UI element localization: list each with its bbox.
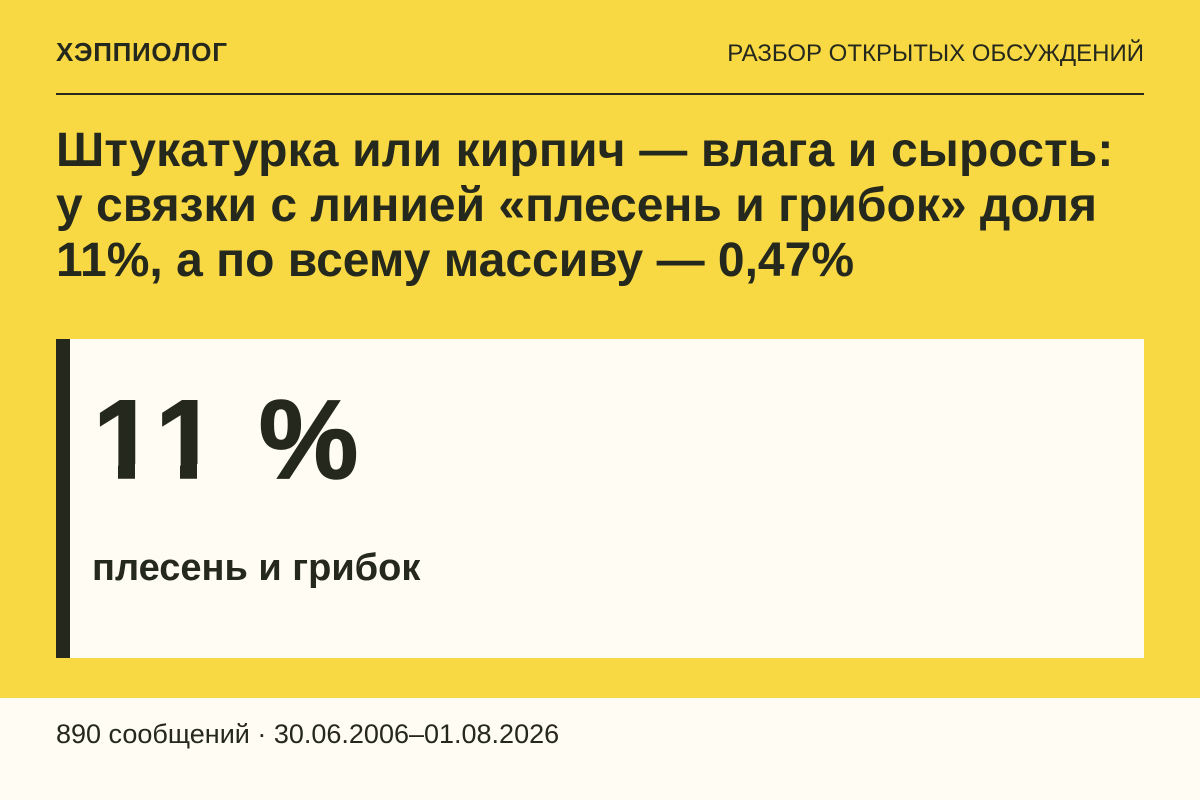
title: 11%, а по всему массиву — 0,47% xyxy=(56,234,854,287)
title xyxy=(56,124,1114,287)
footer text: 890 сообщений · 30.06.2006–01.08.2026 xyxy=(56,719,559,749)
title: Штукатурка или кирпич — влага и сырость: xyxy=(56,124,1114,177)
accent bar xyxy=(56,339,70,658)
panel: main stat xyxy=(56,339,1144,658)
stat label: плесень и грибок xyxy=(92,547,420,589)
header caption: РАЗБОР ОТКРЫТЫХ ОБСУЖДЕНИЙ xyxy=(727,40,1144,67)
title: у связки с линией «плесень и грибок» доля xyxy=(56,179,1097,232)
footer band xyxy=(0,698,1200,800)
big number: 11 % xyxy=(93,377,358,502)
brand name: ХЭППИОЛОГ xyxy=(56,37,228,67)
